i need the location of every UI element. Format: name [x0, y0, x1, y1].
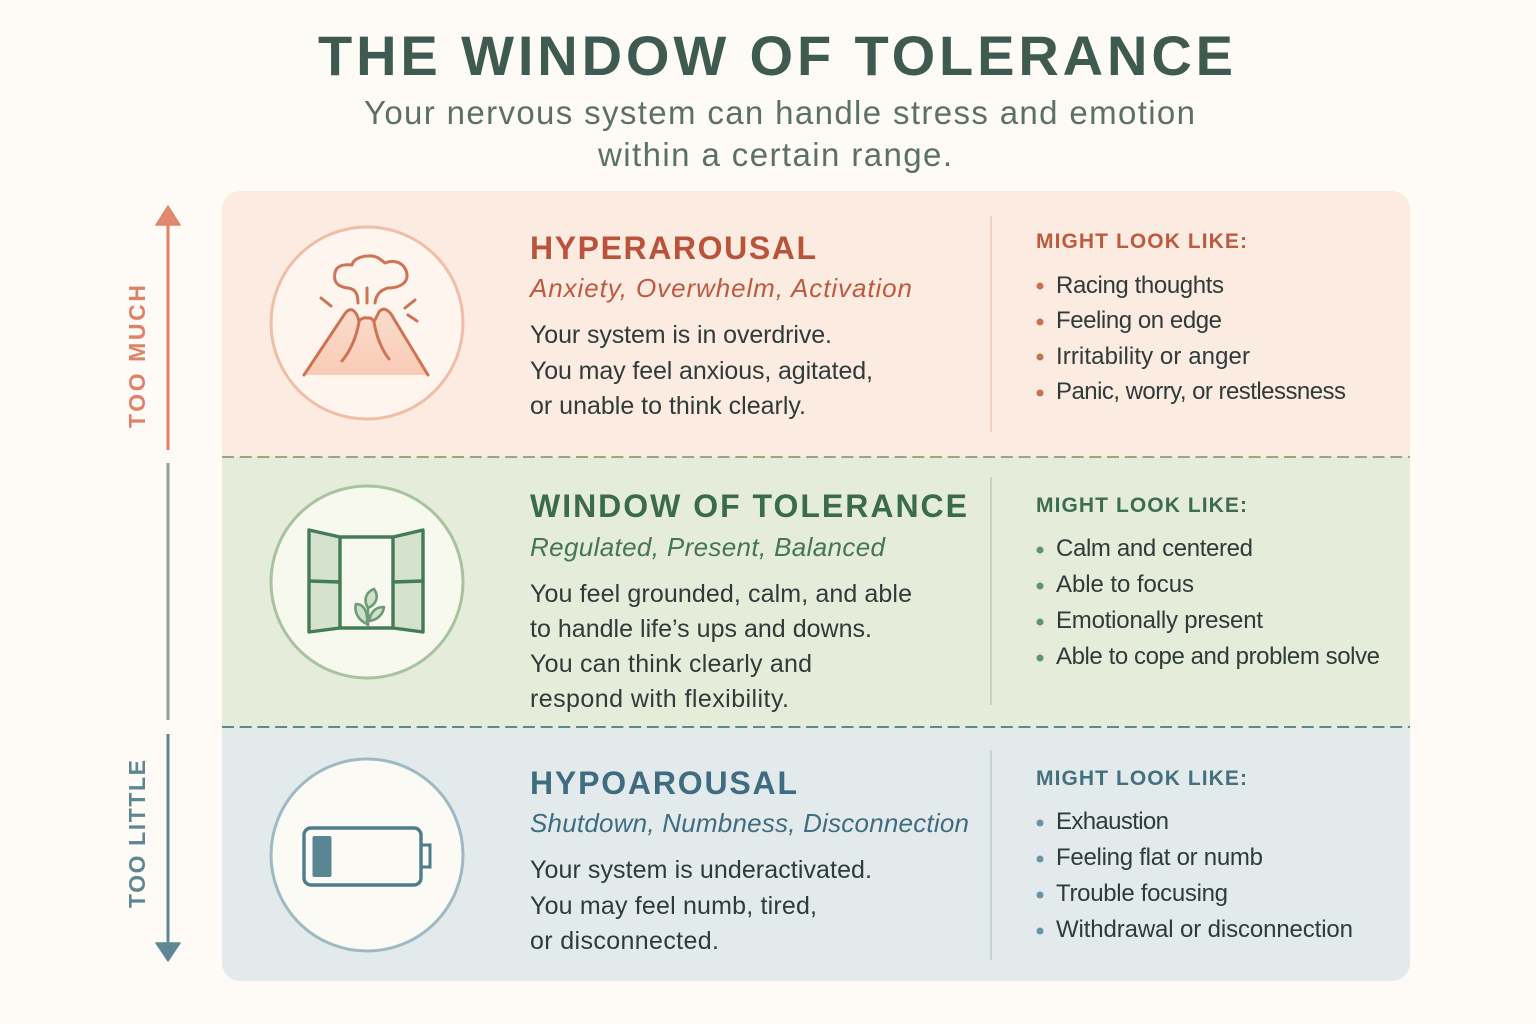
list: hyperarousal signs: Panic, worry, or restlessness	[1056, 378, 1346, 405]
label: might look like: MIGHT LOOK LIKE:	[1036, 767, 1247, 790]
subheading: window of tolerance: Regulated, Present, Balanced	[530, 532, 887, 562]
list: window signs	[1036, 535, 1380, 670]
list: hyperarousal signs: Irritability or anger	[1056, 343, 1250, 370]
icon: open window with plant	[271, 486, 463, 678]
heading: window of tolerance: WINDOW OF TOLERANCE	[530, 488, 967, 524]
heading: hypoarousal: HYPOAROUSAL	[530, 765, 797, 801]
text block: hyperarousal description: You may feel anxious, agitated,	[530, 357, 873, 385]
title: THE WINDOW OF TOLERANCE	[318, 24, 1233, 87]
list: hypoarousal signs: Withdrawal or disconnection	[1056, 916, 1353, 943]
text block: hyperarousal description: or unable to think clearly.	[530, 392, 806, 420]
icon: volcano	[271, 227, 463, 419]
text block: window description: respond with flexibility.	[530, 685, 789, 713]
list: hyperarousal signs: Feeling on edge	[1056, 307, 1222, 334]
list: window signs: Emotionally present	[1056, 607, 1263, 634]
arrow: too little	[156, 734, 180, 961]
list: hypoarousal signs: Exhaustion	[1056, 808, 1169, 835]
panel: window of tolerance	[222, 457, 1410, 727]
list: hyperarousal signs	[1036, 272, 1346, 405]
label: too much: TOO MUCH	[124, 285, 150, 428]
panel: hypoarousal	[222, 727, 1410, 981]
label: might look like: MIGHT LOOK LIKE:	[1036, 230, 1247, 253]
label: might look like: MIGHT LOOK LIKE:	[1036, 494, 1247, 517]
text block: window description	[530, 580, 912, 713]
arrow: window range	[166, 463, 170, 720]
subheading: hyperarousal: Anxiety, Overwhelm, Activation	[528, 273, 912, 303]
list: hypoarousal signs	[1036, 808, 1353, 943]
icon: low battery	[271, 759, 463, 951]
text block: hypoarousal description: or disconnected.	[530, 927, 719, 955]
list: hyperarousal signs: Racing thoughts	[1056, 272, 1224, 299]
text block: hyperarousal description: Your system is in overdrive.	[530, 321, 832, 349]
panel: hyperarousal	[222, 191, 1410, 457]
text block: hypoarousal description: You may feel numb, tired,	[530, 892, 817, 920]
text block: hypoarousal description	[530, 856, 872, 955]
subtitle	[364, 94, 1195, 173]
list: window signs: Able to cope and problem solve	[1056, 643, 1380, 670]
text block: hyperarousal description	[530, 321, 873, 420]
label: too little: TOO LITTLE	[124, 760, 150, 908]
text block: window description: to handle life’s ups and downs.	[530, 615, 872, 643]
subtitle: Your nervous system can handle stress and emotion	[364, 94, 1195, 131]
text block: window description: You feel grounded, calm, and able	[530, 580, 912, 608]
subtitle: within a certain range.	[597, 136, 952, 173]
list: window signs: Able to focus	[1056, 571, 1194, 598]
heading: hyperarousal: HYPERAROUSAL	[530, 230, 816, 266]
list: window signs: Calm and centered	[1056, 535, 1253, 562]
text block: hypoarousal description: Your system is underactivated.	[530, 856, 872, 884]
list: hypoarousal signs: Feeling flat or numb	[1056, 844, 1263, 871]
arrow: too much	[156, 206, 180, 450]
text block: window description: You can think clearly and	[530, 650, 812, 678]
list: hypoarousal signs: Trouble focusing	[1056, 880, 1228, 907]
subheading: hypoarousal: Shutdown, Numbness, Disconnection	[530, 808, 969, 838]
